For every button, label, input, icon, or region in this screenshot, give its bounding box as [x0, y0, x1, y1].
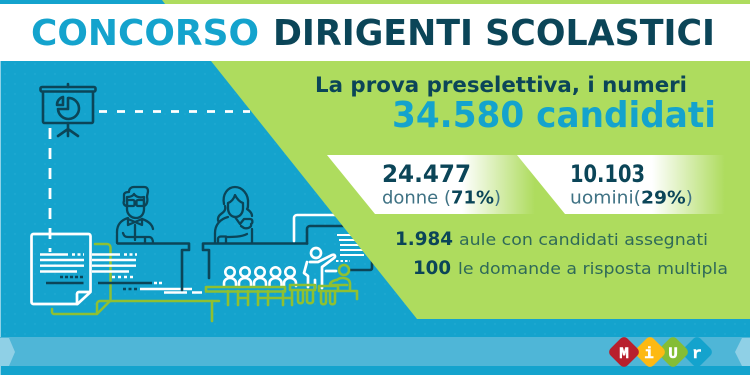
label: donne: donne (71%): [382, 188, 501, 208]
right tab: [735, 338, 750, 366]
illustration: classroom: [32, 84, 373, 321]
top colour strip: [0, 0, 750, 4]
teacher desk 1: [118, 244, 189, 290]
stat: domande: le domande a risposta multipla: [458, 259, 728, 278]
green desks and seated student: [206, 265, 357, 321]
icon: document: [32, 234, 90, 304]
whiteboards: [294, 215, 373, 270]
figure: lecturer: [304, 248, 336, 288]
stat: candidates: 34.580 candidati: [392, 95, 716, 136]
figure: woman: [215, 187, 252, 243]
figure: man with glasses: [117, 187, 153, 243]
stat: domande: 100: [413, 257, 451, 279]
logo: MIUR: U: [668, 345, 678, 363]
left tab: [0, 338, 15, 366]
text lines: white: [40, 254, 202, 292]
label: uomini: uomini(29%): [570, 188, 693, 208]
number: uomini: 10.103: [570, 160, 645, 188]
card: uomini: [517, 155, 725, 214]
title: concorso: CONCORSO: [31, 13, 259, 54]
card: donne: [327, 155, 535, 214]
text lines: dark: [46, 277, 152, 289]
teacher desk 2: [203, 244, 307, 278]
stat: domande: [413, 257, 728, 279]
logo: MIUR: r: [692, 345, 702, 363]
stat: aule: 1.984: [395, 228, 453, 250]
dashed connectors: [50, 112, 250, 252]
green circuit lines: [52, 244, 219, 314]
panel: green diagonal: [211, 61, 750, 319]
icon: presentation board: [40, 84, 96, 136]
title: dirigenti scolastici: DIRIGENTI SCOLASTICI: [273, 13, 715, 54]
logo: MIUR: [607, 335, 714, 369]
stat: aule: aule con candidati assegnati: [459, 230, 708, 249]
number: donne: 24.477: [382, 160, 471, 188]
figures: audience: [224, 267, 296, 286]
stat: aule: [395, 228, 708, 250]
logo: MIUR: M: [619, 345, 629, 363]
logo: MIUR: i: [644, 345, 654, 363]
heading: la prova preselettiva: La prova preselettiva, i numeri: [315, 73, 687, 98]
footer band: [0, 337, 750, 366]
title band: [0, 4, 750, 61]
